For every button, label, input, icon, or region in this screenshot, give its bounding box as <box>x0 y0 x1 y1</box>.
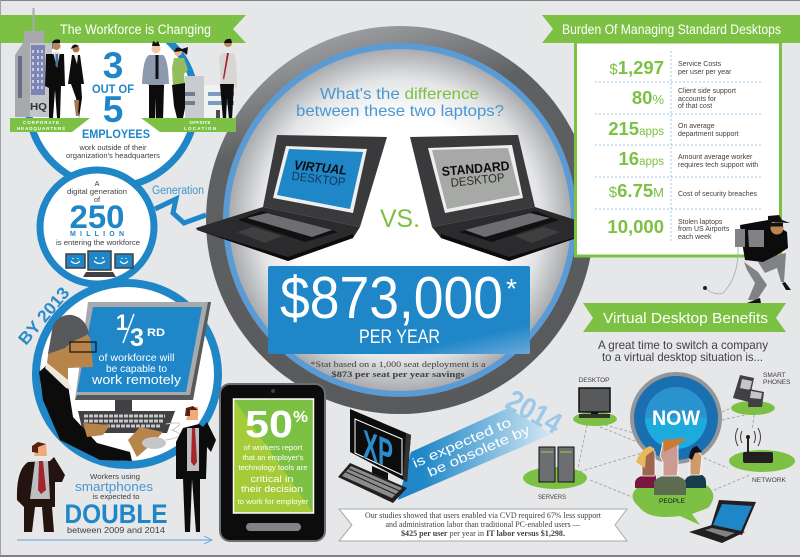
text: 3 out of 5 employees <box>66 45 160 160</box>
icon: standard desktop laptop: STANDARD <box>441 158 510 179</box>
panel: burden of managing standard desktops: Service Costs <box>678 61 722 68</box>
callout: labor study: and administration labor than traditional PC-enabled users — <box>386 520 581 529</box>
callout: yearly saving <box>268 265 530 354</box>
panel: burden of managing standard desktops: per user per year <box>678 69 732 76</box>
panel: burden of managing standard desktops: $6.75M <box>609 180 664 201</box>
panel: digital generation circle <box>40 170 154 284</box>
text: 3 out of 5 employees: OUT OF <box>92 82 134 96</box>
text: 3 out of 5 employees: 3 <box>103 45 123 86</box>
panel: burden of managing standard desktops: Amount average worker <box>678 154 753 161</box>
node: people: PEOPLE <box>659 498 686 505</box>
text: smartphones double: DOUBLE <box>64 499 168 529</box>
banner: the workforce is changing: The Workforce is Changing <box>60 22 211 37</box>
icon: offsite man grey shirt <box>142 41 169 122</box>
panel: digital generation circle: is entering the workforce <box>56 238 140 247</box>
panel: digital generation circle: MILLION <box>70 231 124 238</box>
panel: burden of managing standard desktops: from US Airports <box>678 226 730 233</box>
panel: employees circle <box>28 19 196 187</box>
panel: tablet stat: critical in <box>250 474 294 485</box>
label strip: offsite location <box>141 118 236 132</box>
icon: desktop monitor with stat <box>75 302 211 433</box>
icon: NOW badge <box>632 374 720 462</box>
panel: burden of managing standard desktops <box>542 15 800 256</box>
panel: tablet stat: of workers report <box>244 445 303 452</box>
panel: burden of managing standard desktops: 80% <box>632 87 664 108</box>
panel: burden of managing standard desktops: On average <box>678 123 715 130</box>
banner: virtual desktop benefits: Virtual Desktop Benefits <box>603 310 768 327</box>
label strip: offsite location: LOCATION <box>184 126 216 131</box>
icon: corporate man <box>45 39 65 118</box>
panel: burden of managing standard desktops: requires tech support with <box>678 162 758 169</box>
icon: offsite man white shirt <box>219 39 237 120</box>
text: smartphones double: between 2009 and 2014 <box>67 525 165 535</box>
panel: burden of managing standard desktops: of that cost <box>678 103 712 110</box>
ribbon: XP obsolete by 2014: is expected to <box>410 415 513 471</box>
icon: HQ tower: HQ <box>30 102 47 113</box>
banner: virtual desktop benefits <box>583 303 786 332</box>
callout: labor study: Our studies showed that users enabled via CVD required 67% less support <box>365 511 602 520</box>
panel: digital generation circle: of <box>94 195 101 204</box>
node: network <box>729 428 795 484</box>
panel: burden of managing standard desktops: 16apps <box>618 148 664 169</box>
callout: labor study <box>339 509 627 541</box>
text: benefits intro: to a virtual desktop situation is... <box>602 350 763 364</box>
panel: tablet stat: their decision <box>241 484 303 495</box>
icon: three smiling monitors <box>66 251 133 277</box>
ribbon: XP obsolete by 2014 <box>398 384 567 500</box>
callout: yearly saving: PER YEAR <box>359 327 440 348</box>
panel: burden of managing standard desktops: 215apps <box>608 118 664 139</box>
icon: desktop monitor with stat: RD <box>147 327 165 339</box>
text: stat footnote: *Stat based on a 1,000 seat deployment is a <box>310 359 486 369</box>
panel: burden of managing standard desktops: Client side support <box>678 88 736 95</box>
panel: tablet stat: % <box>293 409 308 426</box>
icon: desktop monitor with stat: 1 <box>116 310 128 335</box>
icon: laptop thief <box>703 215 791 303</box>
label strip: corporate headquarters <box>10 118 90 132</box>
text: smartphones double: is expected to <box>92 492 140 501</box>
callout: labor study: $425 per user per year in IT labor versus $1,298. <box>401 529 565 538</box>
label strip: corporate headquarters: HEADQUARTERS <box>17 126 65 131</box>
icon: desktop monitor with stat: of workforce will <box>98 352 174 364</box>
icon: XP monitor: XP <box>363 420 393 478</box>
text: smartphones double <box>64 472 168 535</box>
node: smart phones: SMART <box>763 372 786 379</box>
icon: man with phone near tablet <box>176 406 216 532</box>
panel: by 2013 remote work circle <box>36 283 218 465</box>
text: 3 out of 5 employees: organization's headquarters <box>66 151 160 160</box>
icon: virtual desktop laptop: DESKTOP <box>291 169 346 189</box>
arrow: generation lightning bolt <box>155 199 206 223</box>
icon: offsite woman green top <box>172 47 188 123</box>
icon: virtual desktop laptop <box>196 135 387 261</box>
text: stat footnote: $873 per seat per year savings <box>332 369 465 379</box>
text: smartphones double: smartphones <box>75 479 154 494</box>
callout: yearly saving: * <box>506 273 517 304</box>
panel: tablet stat: 50 <box>245 404 293 446</box>
icon: desktop monitor with stat: work remotely <box>91 372 182 387</box>
text: generation label: Generation <box>152 185 204 197</box>
panel: burden of managing standard desktops: $1,297 <box>609 57 664 78</box>
text: benefits intro <box>598 338 768 364</box>
node: smart phones: PHONES <box>763 379 791 386</box>
icon: seated worker <box>39 315 180 461</box>
icon: standard desktop laptop <box>410 135 601 261</box>
panel: burden of managing standard desktops: Burden Of Managing Standard Desktops <box>562 22 781 37</box>
node: servers: SERVERS <box>538 494 567 501</box>
node: desktop: DESKTOP <box>578 377 610 384</box>
node: servers <box>523 447 587 501</box>
label strip: offsite location: OFFSITE <box>190 120 210 125</box>
panel: digital generation circle: digital generation <box>67 187 127 196</box>
panel: burden of managing standard desktops: accounts for <box>678 96 717 103</box>
text: benefits intro: A great time to switch a company <box>598 338 768 352</box>
label strip: corporate headquarters: CORPORATE <box>23 120 59 125</box>
icon: XP monitor <box>338 409 411 503</box>
icon: small laptop <box>689 500 756 543</box>
text: 3 out of 5 employees: EMPLOYEES <box>82 129 150 141</box>
panel: tablet stat: to work for employer <box>238 499 309 506</box>
banner: the workforce is changing <box>0 15 246 43</box>
text: 3 out of 5 employees: 5 <box>103 89 123 130</box>
icon: NOW badge: NOW <box>652 407 700 430</box>
icon: desktop monitor with stat: be capable to <box>106 363 167 375</box>
ribbon: XP obsolete by 2014: 2014 <box>500 384 567 441</box>
panel: digital generation circle: 250 <box>70 199 124 235</box>
panel: burden of managing standard desktops: Stolen laptops <box>678 219 723 226</box>
text: smartphones double: Workers using <box>90 472 140 481</box>
panel: burden of managing standard desktops: each week <box>678 234 712 241</box>
icon: virtual desktop laptop: VIRTUAL <box>293 157 348 178</box>
panel: burden of managing standard desktops: 10,000 <box>607 216 664 237</box>
icon: HQ tower <box>15 8 52 117</box>
icon: corporate woman <box>68 45 84 118</box>
panel: burden of managing standard desktops: Cost of security breaches <box>678 191 757 198</box>
text: 3 out of 5 employees: work outside of their <box>78 143 147 152</box>
node: smart phones <box>731 372 791 415</box>
text: stat footnote <box>310 359 486 379</box>
text: by 2013: BY 2013 <box>15 284 73 349</box>
network connection lines <box>575 402 755 497</box>
heading: laptop question: between these two laptops? <box>296 103 504 120</box>
node: people <box>632 438 713 525</box>
heading: laptop question <box>296 86 504 120</box>
panel: central comparison disc <box>206 26 594 414</box>
node: desktop <box>573 377 617 426</box>
panel: tablet stat: technology tools are <box>238 465 308 472</box>
panel: tablet stat: that an employer's <box>242 455 304 462</box>
heading: laptop question: What's the difference <box>320 86 479 103</box>
panel: tablet stat <box>220 384 325 541</box>
panel: digital generation circle: A <box>94 179 100 188</box>
callout: yearly saving: $873,000 <box>280 265 503 331</box>
icon: standard desktop laptop: DESKTOP <box>450 170 505 190</box>
icon: offsite building <box>185 76 234 118</box>
icon: desktop monitor with stat: 3 <box>130 324 144 352</box>
text: versus: VS. <box>380 205 420 233</box>
node: network: NETWORK <box>752 477 787 484</box>
arrow: timeline <box>17 536 212 544</box>
ribbon: XP obsolete by 2014: be obsolete by <box>425 422 532 480</box>
icon: man with phone left <box>17 442 65 532</box>
panel: burden of managing standard desktops: department support <box>678 131 739 138</box>
